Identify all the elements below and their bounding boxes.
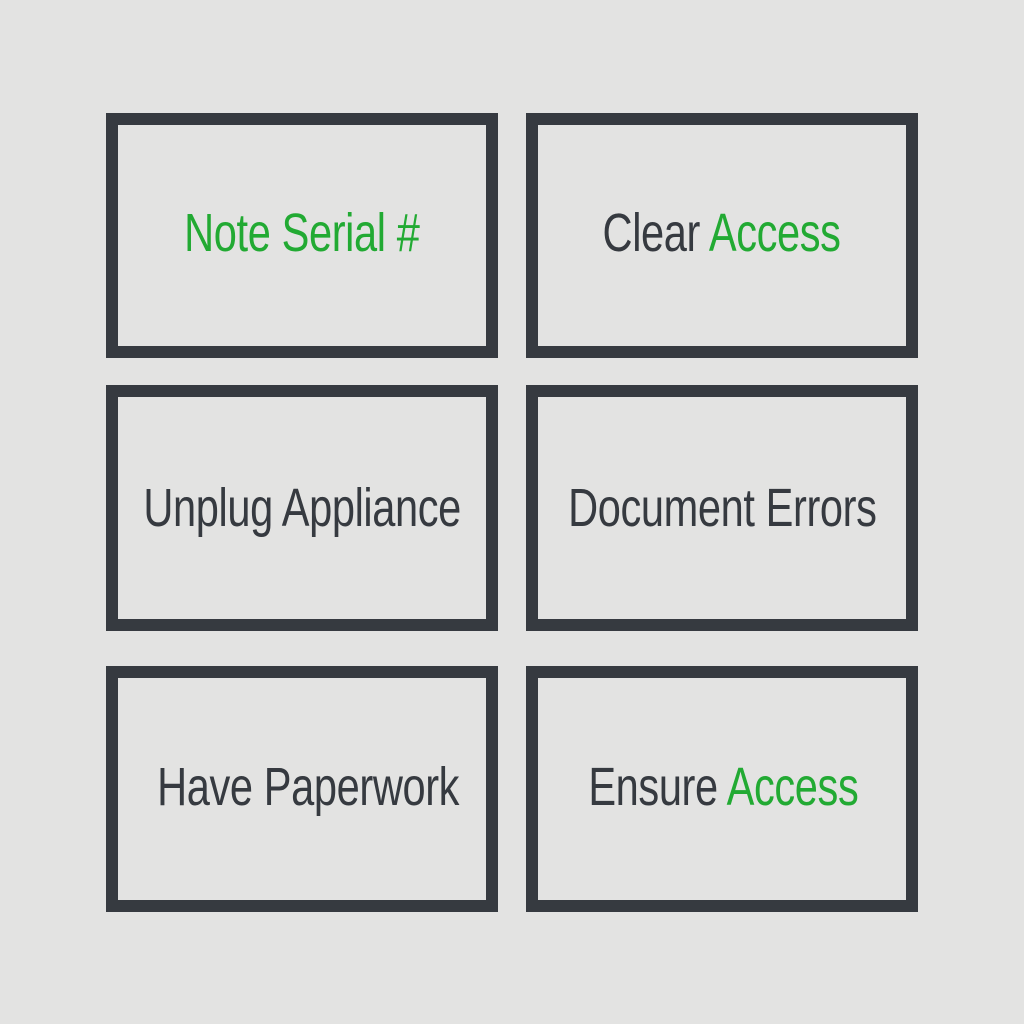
panel: unplug appliance xyxy=(106,385,498,631)
text: have paperwork: Have Paperwork xyxy=(157,757,459,817)
text: note serial: Note Serial # xyxy=(184,203,420,263)
panel: document errors xyxy=(526,385,918,631)
text: unplug appliance: Unplug Appliance xyxy=(143,478,461,538)
text: clear access: Clear Access xyxy=(603,203,841,263)
panel: clear access xyxy=(526,113,918,358)
text: document errors: Document Errors xyxy=(568,478,876,538)
panel: note serial xyxy=(106,113,498,358)
text: ensure access: Ensure Access xyxy=(588,757,858,817)
panel: have paperwork xyxy=(106,666,498,912)
panel: ensure access xyxy=(526,666,918,912)
